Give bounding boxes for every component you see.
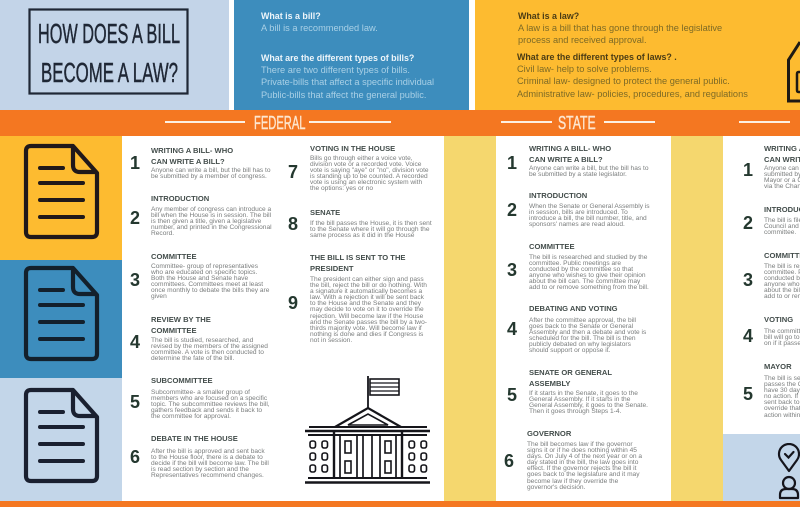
state step 5: SENATE OR GENERAL (529, 368, 612, 377)
federal step 8: If the bill passes the House, it is then sent (310, 220, 432, 227)
state step 5: If it starts in the Senate, it goes to the (529, 390, 638, 397)
federal step 7: division vote or a recorded vote. Voice (310, 161, 421, 168)
federal step 3: committees. Committees meet at least (151, 281, 263, 288)
panel: title background (0, 0, 229, 110)
state step 2: in session, bills are introduced. To (529, 209, 628, 216)
city step 5: 5 (743, 384, 753, 404)
federal step 6: 6 (130, 447, 140, 467)
federal step 5: members who are focused on a specific (151, 395, 267, 402)
heading: state: STATE (558, 113, 596, 133)
types of bills text: There are two different types of bills. (261, 65, 410, 75)
state step 3: committee. Public meetings are (529, 260, 621, 267)
city step 5 (743, 362, 800, 419)
federal step 9: a signature it automatically becomes a (310, 288, 422, 295)
federal step 9: The president can either sign and pass (310, 276, 424, 283)
panel: what is a bill (234, 0, 469, 110)
bill definition text (261, 11, 378, 33)
federal step 4: revised by the members of the assigned (151, 343, 268, 350)
panel: pale yellow strip right (671, 136, 723, 501)
federal step 3: once monthly to debate the bills they are (151, 287, 269, 294)
state step 1 (507, 144, 648, 178)
federal step 7 (288, 144, 429, 192)
federal step 9: nothing is done and dies if Congress is (310, 331, 423, 338)
state step 6 (504, 429, 642, 491)
law definition text: process and received approval. (518, 35, 647, 45)
federal step 3: Committee- group of representatives (151, 263, 258, 270)
federal step 4: The bill is studied, researched, and (151, 337, 253, 344)
icon: document light blue (24, 388, 100, 484)
state step 4: 4 (507, 319, 517, 339)
state step 3: conducted by the committee so that (529, 266, 633, 273)
state step 5: General Assembly. If it starts in the (529, 396, 630, 403)
state step 4: After the committee approval, the bill (529, 317, 636, 324)
heading: city divider (739, 121, 790, 123)
panel: blue icon block (0, 260, 122, 378)
state step 6: governor's decision. (527, 484, 585, 491)
state step 5: General Assembly, it goes to the Senate. (529, 402, 648, 409)
icon: person (778, 476, 800, 500)
federal step 5 (130, 376, 270, 420)
city step 4 (743, 315, 800, 347)
types of laws text: What are the different types of laws? . (517, 52, 677, 62)
federal step 6 (130, 434, 269, 479)
icon: document yellow (24, 144, 100, 240)
state step 4 (507, 304, 646, 354)
state step 1: WRITING A BILL- WHO (529, 144, 611, 153)
federal step 9: thirds majority vote. Will become law if (310, 325, 422, 332)
state step 6: effect. If the governor rejects the bill it (527, 465, 636, 472)
state step 2: introduce a bill, the bill number, title, and (529, 215, 647, 222)
icon: location pin with check (778, 443, 800, 472)
federal step 6: DEBATE IN THE HOUSE (151, 434, 238, 443)
title (28, 8, 189, 95)
federal step 4: committee. A vote is then conducted to (151, 349, 264, 356)
bill definition text: What is a bill? (261, 11, 321, 21)
federal step 9: 9 (288, 293, 298, 313)
federal step 1: Anyone can write a bill, but the bill has to (151, 167, 270, 174)
city step 3: 3 (743, 270, 753, 290)
icon: document blue (24, 266, 100, 362)
federal step 5: 5 (130, 392, 140, 412)
federal step 9: the bill, reject the bill or do nothing. With (310, 282, 427, 289)
city step 2 (743, 205, 800, 236)
federal step 9: PRESIDENT (310, 264, 353, 272)
federal step 6: to the House floor, there is a debate to (151, 454, 263, 461)
state step 3: add to or remove something from the bill. (529, 284, 649, 291)
federal step 6: decide if the bill will become law. The bill (151, 460, 269, 467)
state step 3 (507, 242, 649, 291)
city step 2: 2 (743, 213, 753, 233)
orange section band (0, 110, 800, 136)
types of laws text: Civil law- help to solve problems. (517, 64, 652, 74)
federal step 2: Any member of congress can introduce a (151, 206, 271, 213)
types of laws text: Administrative law- policies, procedures, and regulations (517, 89, 748, 99)
state step 3: COMMITTEE (529, 242, 575, 251)
state step 1: CAN WRITE A BILL? (529, 154, 603, 164)
state step 6: signs it or if he does nothing within 45 (527, 447, 637, 454)
federal step 6: After the bill is approved and sent back (151, 448, 265, 455)
federal step 7: Bills go through either a voice vote, (310, 155, 413, 162)
state step 3: about the bill can. The committee may (529, 278, 640, 285)
state step 6: become law if they override the (527, 478, 618, 485)
federal step 9: not in session. (310, 337, 352, 344)
federal step 1: 1 (130, 153, 140, 173)
icon: house (787, 41, 800, 102)
heading: federal: FEDERAL (254, 113, 305, 133)
bill definition text: A bill is a recommended law. (261, 23, 378, 33)
types of bills text: Public-bills that affect the general public. (261, 90, 426, 100)
federal step 5: SUBCOMMITTEE (151, 376, 213, 385)
federal step 3 (130, 252, 270, 300)
city step 3 (743, 251, 800, 300)
federal step 5: the committee for approval. (151, 413, 231, 420)
federal step 6: is read section by section and the (151, 466, 249, 473)
state step 5: 5 (507, 385, 517, 405)
state step 6: The bill becomes law if the governor (527, 441, 633, 448)
federal step 7: is standing up to be counted. A recorded (310, 173, 428, 180)
federal step 8: SENATE (310, 208, 340, 217)
state step 4: DEBATING AND VOTING (529, 304, 618, 313)
federal step 3: COMMITTEE (151, 252, 197, 261)
federal step 1: CAN WRITE A BILL? (151, 156, 225, 166)
state step 4: goes back to the Senate or General (529, 323, 633, 330)
federal step 4: COMMITTEE (151, 326, 197, 334)
state step 2: INTRODUCTION (529, 191, 587, 200)
federal step 7: VOTING IN THE HOUSE (310, 144, 395, 153)
federal step 5: topic. The subcommittee reviews the bill, (151, 401, 270, 408)
panel: yellow icon block (0, 136, 122, 260)
federal step 8 (288, 208, 432, 239)
types of bills text (261, 53, 434, 100)
federal step 4: REVIEW BY THE (151, 315, 211, 324)
state step 3: 3 (507, 260, 517, 280)
state step 5 (507, 368, 648, 415)
federal step 9 (288, 253, 427, 344)
city step 2: committee. (764, 229, 796, 236)
types of bills text: What are the different types of bills? (261, 53, 414, 63)
federal step 9: THE BILL IS SENT TO THE (310, 253, 406, 262)
state step 2: When the Senate or General Assembly is (529, 203, 650, 210)
federal step 2: 2 (130, 208, 140, 228)
federal step 7: the options: yes or no (310, 185, 373, 192)
federal step 9: and the Senate passes the bill by a two- (310, 319, 427, 326)
state step 6: days. On July 4 of the next year or on a (527, 453, 642, 460)
federal step 4 (130, 315, 268, 362)
federal step 4: 4 (130, 332, 140, 352)
federal step 9: rejection. Will become law if the House (310, 313, 423, 320)
state step 1: be submitted by a state legislator. (529, 171, 627, 178)
types of bills text: Private-bills that affect a specific individual (261, 77, 434, 87)
federal step 9: may decide to vote on it to override the (310, 306, 424, 313)
federal step 3: 3 (130, 270, 140, 290)
federal step 1 (130, 146, 270, 180)
city step 1: 1 (743, 160, 753, 180)
icon: capitol building with flag (305, 376, 430, 484)
panel: light blue icon block right (723, 434, 800, 501)
federal step 3: who are educated on specific topics. (151, 269, 257, 276)
federal step 7: vote is using an electronic system with (310, 179, 422, 186)
state step 5: ASSEMBLY (529, 378, 570, 388)
state step 2: 2 (507, 200, 517, 220)
state step 1: Anyone can write a bill, but the bill has to (529, 165, 648, 172)
state step 6: day stated in the bill, the law goes into (527, 459, 638, 466)
state step 6: goes back to the legislature and it may (527, 471, 640, 478)
federal step 7: 7 (288, 162, 298, 182)
state step 6: GOVERNOR (527, 429, 571, 438)
federal step 9: law. With a rejection it will be sent back (310, 294, 424, 301)
panel: pale yellow strip (444, 136, 496, 501)
state step 1: 1 (507, 153, 517, 173)
state step 3: The bill is researched and studied by the (529, 254, 647, 261)
federal step 1: be submitted by a member of congress. (151, 173, 267, 180)
city step 4: VOTING (764, 315, 793, 324)
bottom orange band (0, 501, 800, 507)
federal step 8: 8 (288, 214, 298, 234)
state step 4: scheduled for the bill. The bill is then (529, 335, 636, 342)
federal step 2: bill when the House is in session. The bill (151, 212, 271, 219)
law definition text: What is a law? (518, 11, 579, 21)
state step 4: should support or oppose it. (529, 347, 610, 354)
state step 6: 6 (504, 451, 514, 471)
federal step 5: Subcommittee- a smaller group of (151, 389, 250, 396)
state step 3: anyone who wishes to give their opinion (529, 272, 646, 279)
panel: what is a law (475, 0, 800, 110)
state step 4: Assembly and then a debate and vote is (529, 329, 646, 336)
federal step 2 (130, 194, 272, 237)
city step 5: MAYOR (764, 362, 792, 371)
federal step 5: gathers feedback and sends it back to (151, 407, 262, 414)
federal step 3: given (151, 293, 167, 300)
federal step 8: to the Senate where it will go through the (310, 226, 430, 233)
city step 4: 4 (743, 326, 753, 346)
federal step 6: Representatives recommend changes. (151, 472, 264, 479)
state step 2 (507, 191, 650, 228)
state step 5: Then it goes through Steps 1-4. (529, 408, 621, 415)
panel: light blue icon block (0, 378, 122, 501)
law definition text: A law is a bill that has gone through the legislative (518, 23, 722, 33)
federal step 8: same process as it did in the House (310, 232, 414, 239)
federal step 7: vote is saying "aye" or "no", division vote (310, 167, 429, 174)
federal step 2: is then given a title, given a legislative (151, 218, 261, 225)
federal step 9: to the House and the Senate and they (310, 300, 421, 307)
federal step 4: determine the fate of the bill. (151, 355, 234, 362)
state step 2: sponsors' names are read aloud. (529, 221, 625, 228)
state step 4: publicly debated on why legislators (529, 341, 631, 348)
federal step 3: Both the House and Senate have (151, 275, 248, 282)
federal step 2: Record. (151, 230, 174, 237)
federal step 2: INTRODUCTION (151, 194, 209, 203)
federal step 2: number, and printed in the Congressional (151, 224, 272, 231)
types of laws text: Criminal law- designed to protect the general public. (517, 76, 730, 86)
types of laws text (517, 52, 748, 99)
law definition text (518, 11, 722, 45)
city step 1 (743, 144, 800, 190)
federal step 1: WRITING A BILL- WHO (151, 146, 233, 155)
